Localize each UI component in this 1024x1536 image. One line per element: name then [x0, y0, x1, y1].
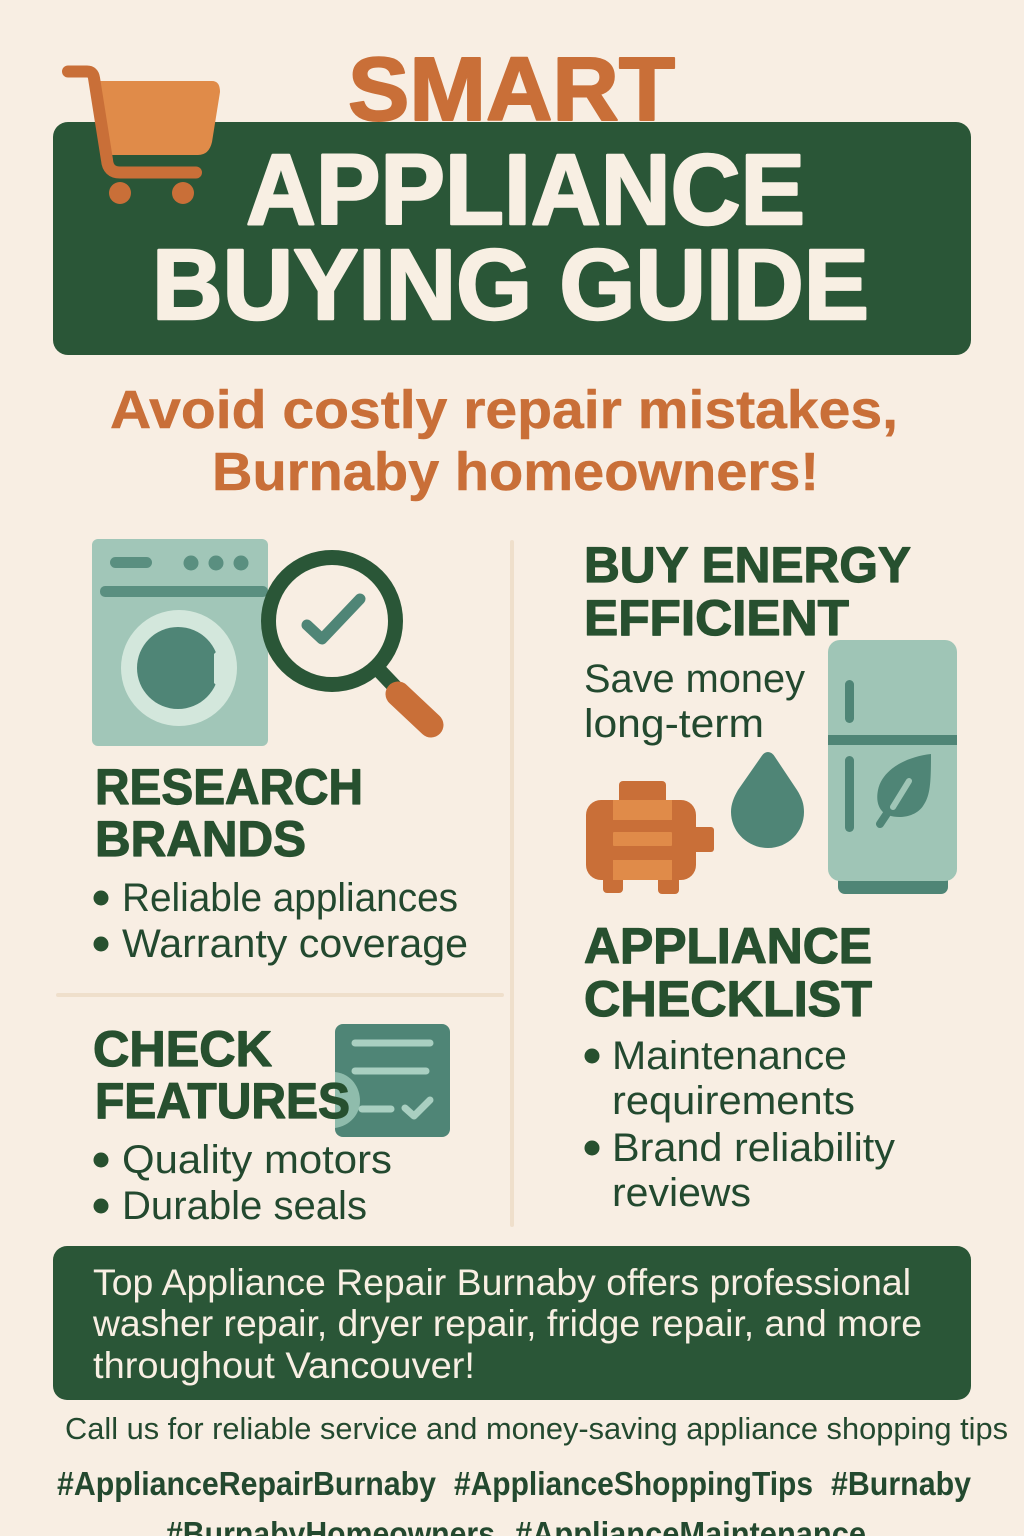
text: save money long-term: [584, 657, 805, 746]
heading: appliance checklist: APPLIANCE: [584, 918, 872, 974]
text: save money long-term: Save money: [584, 657, 805, 701]
list: check features: [94, 1138, 392, 1228]
title: APPLIANCE: APPLIANCE: [246, 134, 805, 246]
subtitle: Burnaby homeowners!: [212, 442, 819, 502]
hashtags: #Burnaby: [831, 1465, 972, 1502]
list: research brands: [94, 876, 468, 966]
list: appliance checklist: requirements: [612, 1079, 855, 1123]
callout banner: Top Appliance Repair Burnaby offers professional: [93, 1262, 911, 1303]
list: check features: Durable seals: [122, 1184, 367, 1228]
callout banner: washer repair, dryer repair, fridge repair, and more: [92, 1303, 922, 1344]
icon: checklist card: [335, 1024, 450, 1137]
icon: magnifying glass with check: [268, 558, 431, 725]
subtitle: Avoid costly repair mistakes,: [110, 380, 898, 440]
heading: research brands: [95, 759, 363, 867]
list: appliance checklist: Maintenance: [612, 1034, 847, 1078]
heading: research brands: RESEARCH: [95, 759, 363, 815]
icon: water drop: [731, 752, 804, 848]
heading: appliance checklist: CHECKLIST: [584, 971, 872, 1027]
heading: research brands: BRANDS: [95, 811, 306, 867]
list: research brands: Warranty coverage: [122, 922, 468, 966]
subtitle: [110, 380, 898, 502]
hashtags: #ApplianceRepairBurnaby: [57, 1465, 437, 1502]
title: SMART: SMART: [348, 40, 675, 140]
vertical divider: [510, 540, 514, 1227]
list: check features: Quality motors: [122, 1138, 392, 1182]
horizontal divider: [56, 993, 504, 997]
icon: fridge with leaf: [828, 640, 957, 894]
heading: buy energy efficient: [584, 537, 911, 646]
list: appliance checklist: reviews: [612, 1171, 751, 1215]
heading: check features: FEATURES: [95, 1073, 350, 1129]
title: BUYING GUIDE: BUYING GUIDE: [152, 229, 869, 341]
callout banner: throughout Vancouver!: [93, 1345, 475, 1386]
call to action text: Call us for reliable service and money-saving appliance shopping tips: [65, 1411, 1008, 1446]
heading: check features: CHECK: [93, 1021, 272, 1077]
heading: check features: [93, 1021, 350, 1129]
callout banner: [53, 1246, 971, 1400]
icon: motor: [586, 781, 714, 894]
icon: shopping cart: [68, 72, 220, 204]
hashtags: #ApplianceShoppingTips: [454, 1465, 813, 1502]
icon: washing machine: [92, 539, 268, 746]
list: appliance checklist: [584, 1034, 895, 1215]
heading: buy energy efficient: BUY ENERGY: [584, 537, 911, 593]
heading: appliance checklist: [584, 918, 872, 1027]
title banner: [53, 122, 971, 355]
text: save money long-term: long-term: [584, 702, 764, 746]
hashtags: [57, 1465, 972, 1536]
list: appliance checklist: Brand reliability: [612, 1126, 895, 1170]
list: research brands: Reliable appliances: [122, 876, 458, 920]
heading: buy energy efficient: EFFICIENT: [584, 590, 849, 646]
